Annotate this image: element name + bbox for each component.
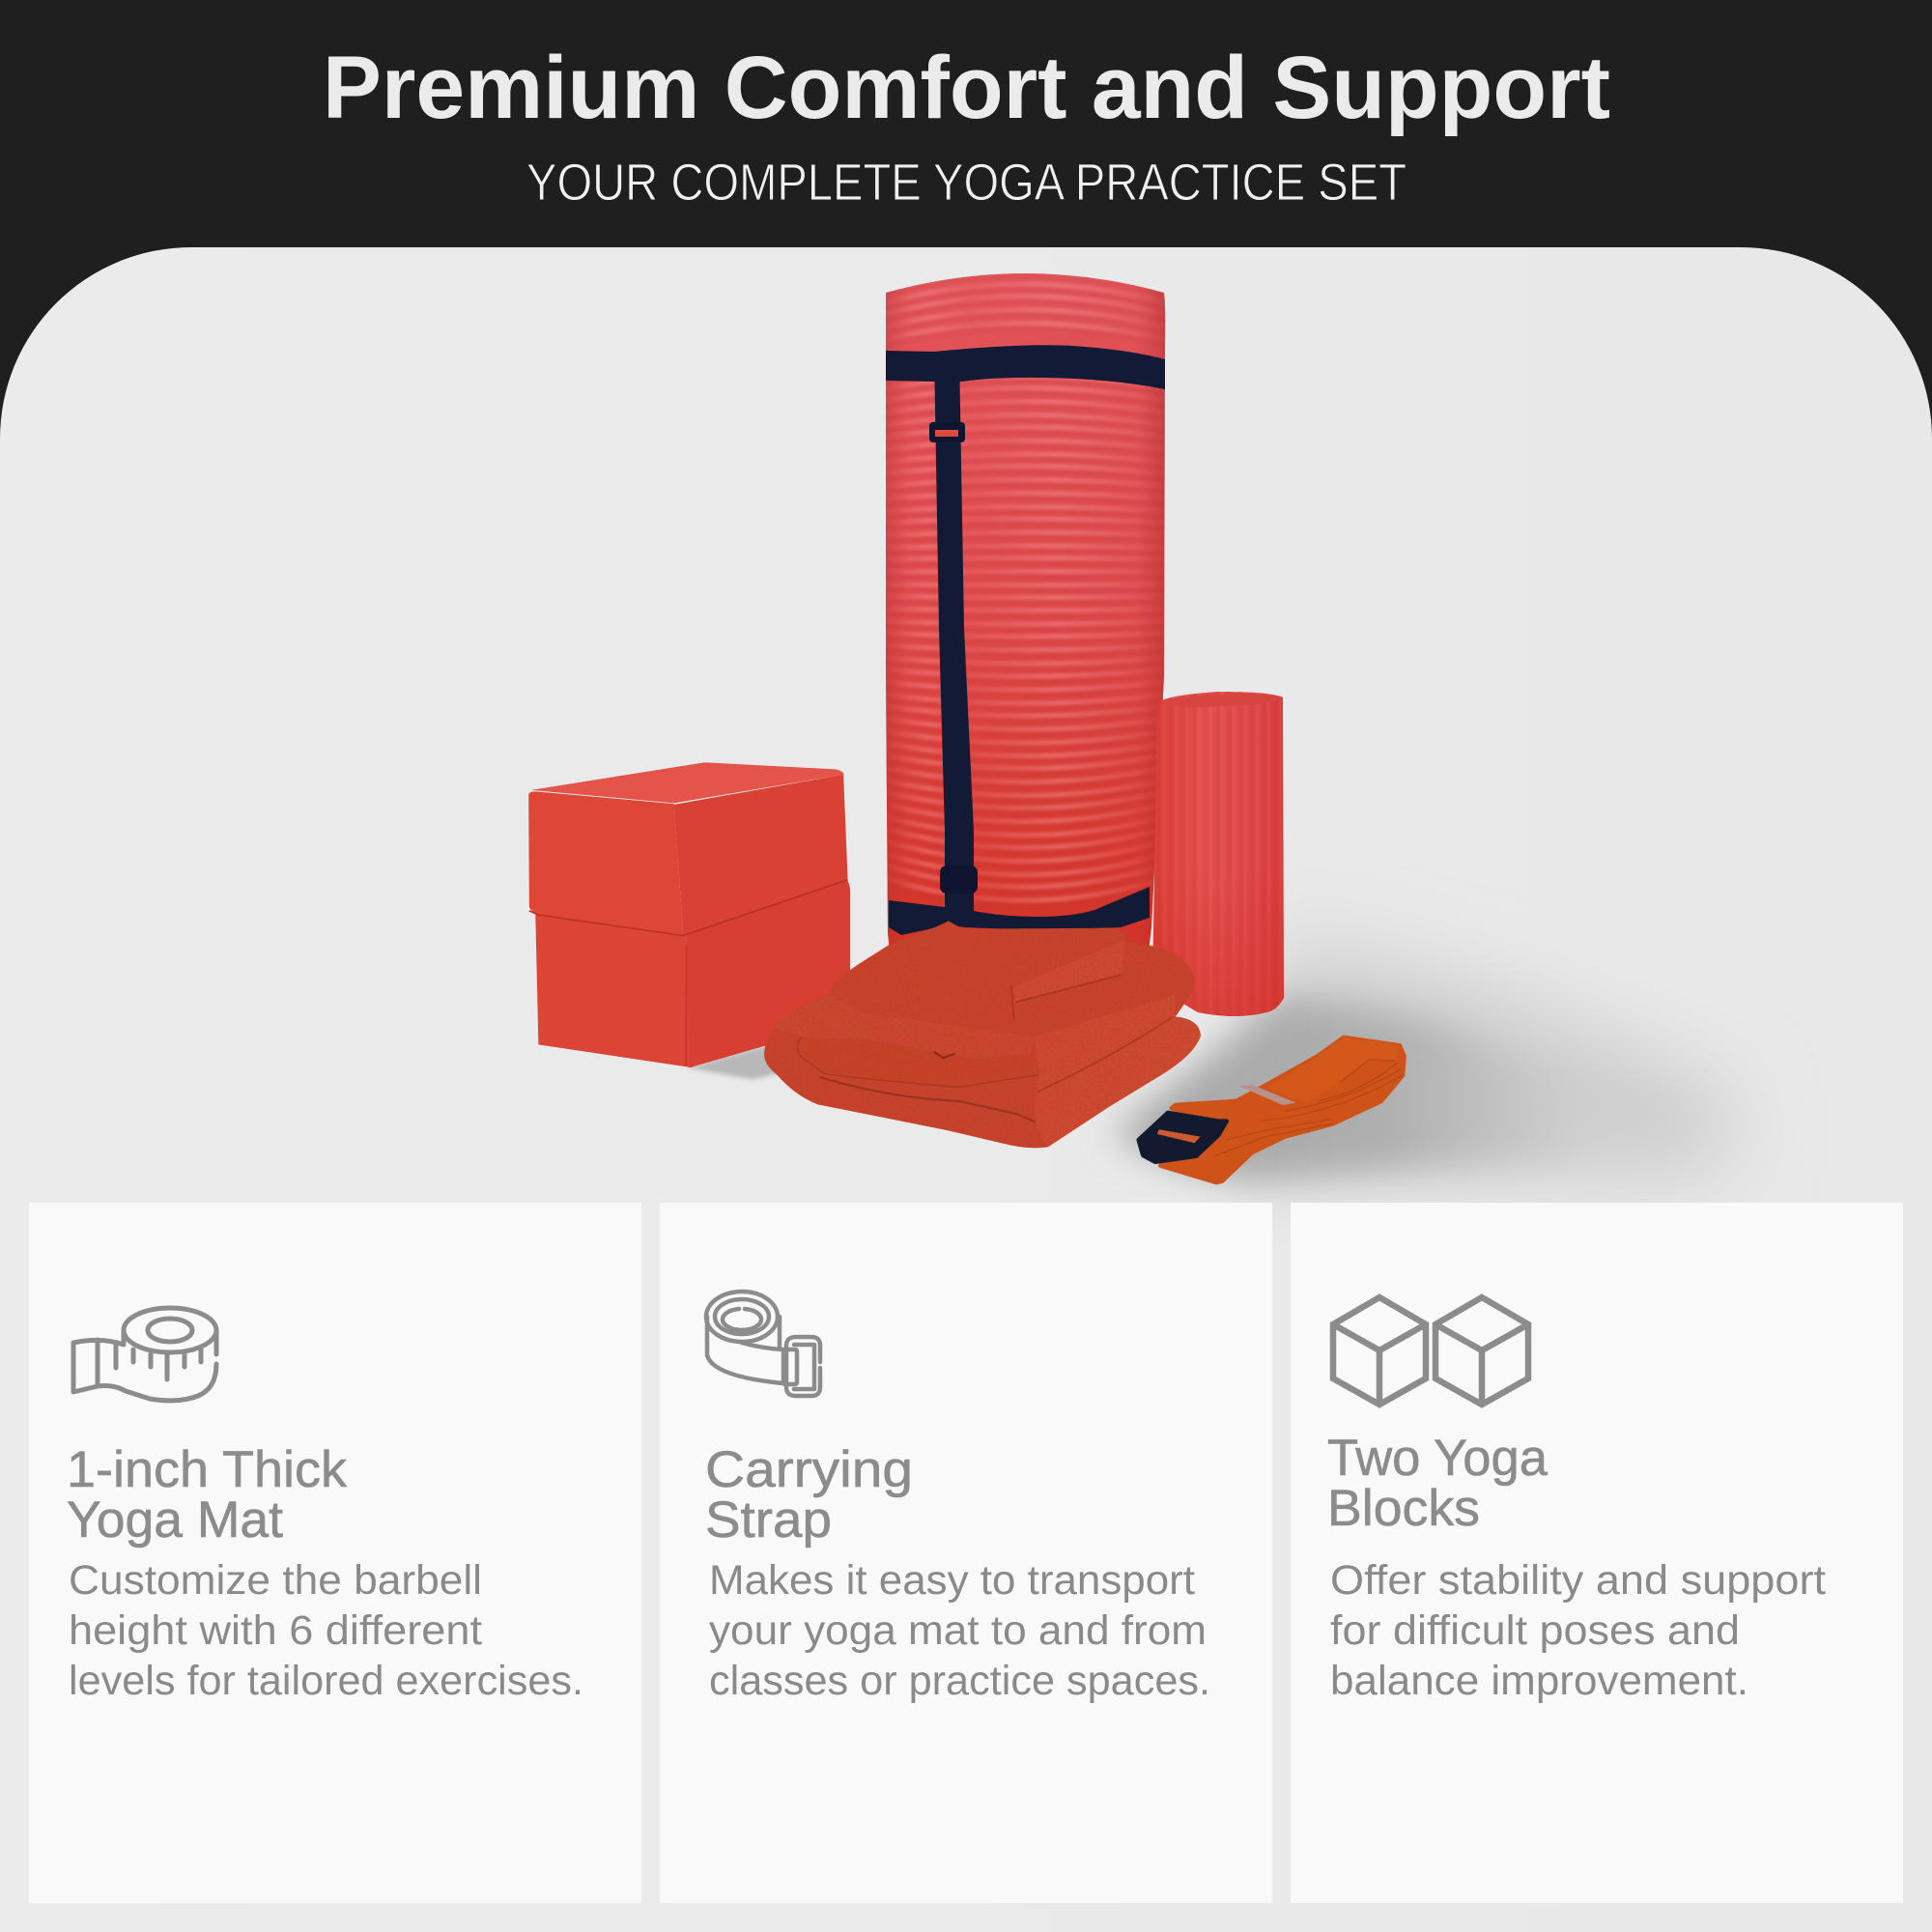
heading: Two Yoga bbox=[1327, 1430, 1548, 1487]
card: two yoga blocks bbox=[1291, 1203, 1903, 1903]
description: for difficult poses and bbox=[1330, 1607, 1740, 1654]
strap buckle top bbox=[929, 422, 965, 442]
vertical carrying strap bbox=[889, 352, 1150, 935]
description: your yoga mat to and from bbox=[709, 1607, 1207, 1654]
towel top fold band bbox=[773, 995, 1034, 1059]
subtitle: YOUR COMPLETE YOGA PRACTICE SET bbox=[526, 154, 1406, 212]
orange yoga strap bbox=[1139, 1037, 1404, 1182]
heading: Yoga Mat bbox=[67, 1492, 283, 1548]
header band bbox=[0, 0, 1932, 464]
description bbox=[69, 1557, 583, 1704]
strap fold lines bbox=[1214, 1060, 1403, 1156]
folded small towel bbox=[831, 921, 1127, 1024]
block shadow bbox=[686, 1021, 890, 1080]
heading bbox=[705, 1441, 913, 1548]
heading: Strap bbox=[705, 1492, 832, 1548]
description: height with 6 different bbox=[69, 1607, 482, 1654]
yoga mat roll bbox=[886, 270, 1165, 952]
strap buckle bottom bbox=[940, 866, 978, 894]
card: carrying strap bbox=[660, 1203, 1272, 1903]
floor shadow bbox=[1111, 937, 1729, 1182]
description: levels for tailored exercises. bbox=[69, 1658, 583, 1704]
description bbox=[709, 1557, 1210, 1704]
card: 1-inch thick yoga mat bbox=[29, 1203, 641, 1903]
foam yoga blocks bbox=[528, 762, 890, 1080]
heading bbox=[1327, 1430, 1548, 1537]
description bbox=[1330, 1557, 1826, 1704]
icon: measuring tape bbox=[73, 1308, 216, 1401]
icon: rolled strap bbox=[706, 1292, 820, 1396]
strap metal clip bbox=[1238, 1085, 1295, 1105]
folded large towel bbox=[764, 942, 1201, 1148]
heading bbox=[67, 1441, 348, 1548]
heading: Blocks bbox=[1327, 1480, 1480, 1537]
mat top strap band bbox=[886, 345, 1165, 389]
heading: 1-inch Thick bbox=[67, 1441, 348, 1498]
strap black buckle bbox=[1139, 1113, 1226, 1162]
heading: Carrying bbox=[705, 1441, 913, 1498]
description: Customize the barbell bbox=[69, 1557, 482, 1604]
towel lower lip bbox=[819, 1077, 1036, 1122]
title: Premium Comfort and Support bbox=[323, 39, 1610, 137]
strap upper loop bbox=[1266, 1037, 1400, 1103]
product photo: yoga set bbox=[528, 270, 1404, 1182]
towel right face bbox=[1034, 995, 1201, 1147]
description: balance improvement. bbox=[1330, 1658, 1748, 1704]
foam knee roller bbox=[1152, 692, 1284, 1016]
description: Offer stability and support bbox=[1330, 1557, 1826, 1604]
description: Makes it easy to transport bbox=[709, 1557, 1195, 1604]
icon: two cubes bbox=[1333, 1297, 1528, 1405]
description: classes or practice spaces. bbox=[709, 1658, 1210, 1704]
towel inner roll bbox=[799, 1038, 1040, 1087]
folded towels bbox=[764, 921, 1201, 1148]
upper yoga block bbox=[528, 762, 848, 936]
lower yoga block bbox=[535, 880, 850, 1067]
